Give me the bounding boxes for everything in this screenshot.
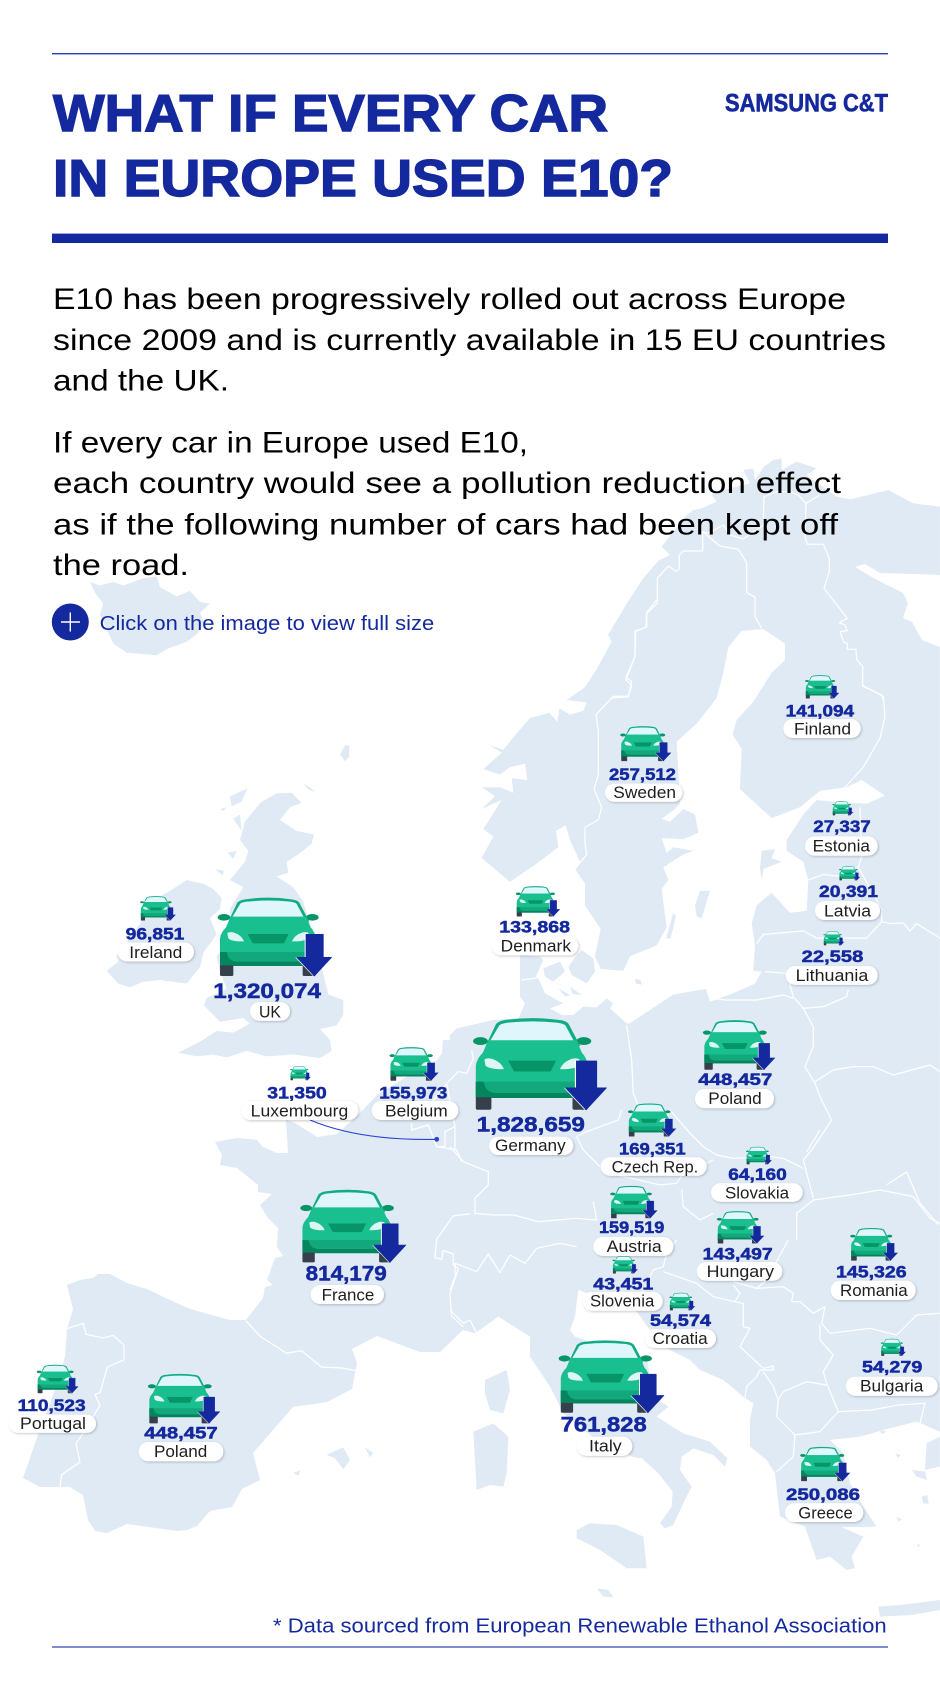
label pill: Latvia: [824, 902, 872, 920]
label pill: UK: [259, 1004, 281, 1022]
bottom rule: [52, 1646, 888, 1648]
value: 169,351: [619, 1140, 686, 1158]
value: 257,512: [609, 766, 676, 784]
value: 96,851: [126, 925, 184, 943]
marker: Luxembourg: [241, 1066, 358, 1121]
marker: France: [300, 1190, 406, 1304]
intro paragraph 1: [53, 283, 886, 398]
value: 54,574: [650, 1312, 712, 1330]
marker: Bulgaria: [846, 1339, 938, 1396]
value: 814,179: [306, 1262, 387, 1285]
land: Italy, Balkans, islands: [450, 1240, 940, 1617]
marker: Ireland: [118, 896, 194, 962]
label pill: Portugal: [20, 1415, 86, 1433]
label pill: France: [322, 1286, 374, 1304]
value: 20,391: [819, 883, 878, 901]
value: 145,326: [836, 1264, 907, 1282]
value: 155,973: [379, 1084, 447, 1102]
value: 250,086: [786, 1486, 860, 1504]
car icon: [703, 1020, 775, 1070]
car icon: [717, 1211, 764, 1244]
land: northern Scandinavia top: [659, 458, 940, 562]
car icon: [37, 1365, 78, 1393]
intro paragraph 1: E10 has been progressively rolled out across Europe: [53, 283, 846, 316]
land: Balearic islands: [293, 1447, 373, 1476]
map of Europe: [23, 458, 940, 1617]
marker: Austria: [593, 1186, 673, 1256]
marker: Poland: [695, 1020, 775, 1108]
car icon: [800, 1447, 850, 1481]
land: Iceland, Britain and Ireland: [90, 576, 349, 1058]
car icon: [389, 1047, 438, 1081]
label pill: Czech Rep.: [612, 1158, 698, 1176]
intro paragraph 2: If every car in Europe used E10,: [53, 426, 528, 459]
marker: Portugal: [9, 1365, 96, 1433]
label pill: Finland: [794, 720, 851, 738]
label pill: Austria: [607, 1238, 663, 1256]
car icon: [805, 675, 839, 698]
icon: plus circle: [52, 604, 89, 640]
marker: Sweden: [605, 726, 682, 802]
label pill: Slovakia: [725, 1184, 790, 1202]
label pill: Croatia: [653, 1330, 709, 1348]
intro paragraph 2: as if the following number of cars had been kept off: [53, 508, 839, 542]
land: Scandinavia, Finland, Baltics: [482, 560, 940, 1025]
marker: Lithuania: [786, 931, 878, 985]
car icon: [290, 1066, 311, 1080]
value: 761,828: [561, 1414, 647, 1437]
value: 31,350: [267, 1084, 327, 1102]
car icon: [620, 726, 671, 761]
sea: White Sea: [855, 564, 940, 647]
car icon: [218, 898, 332, 976]
label pill: Poland: [154, 1443, 207, 1461]
label pill: Denmark: [501, 938, 572, 956]
label pill: Italy: [589, 1438, 623, 1456]
car icon: [628, 1103, 676, 1137]
source note: * Data sourced from European Renewable Ethanol Association: [273, 1615, 887, 1638]
value: 159,519: [599, 1219, 664, 1237]
car icon: [148, 1374, 220, 1423]
value: 133,868: [499, 919, 570, 937]
label pill: Lithuania: [796, 967, 869, 985]
value: 448,457: [698, 1071, 772, 1089]
value: 64,160: [728, 1166, 787, 1184]
car icon: [612, 1256, 638, 1274]
intro paragraph 2: each country would see a pollution reduction effect: [53, 467, 842, 500]
label pill: Ireland: [129, 944, 182, 962]
marker: Hungary: [697, 1211, 782, 1281]
car icon: [300, 1190, 406, 1262]
marker: Slovenia: [583, 1256, 663, 1311]
title rule: [52, 234, 888, 243]
marker: Spain (labelled Poland): [139, 1374, 223, 1461]
label pill: Slovenia: [590, 1293, 655, 1311]
click to view full size: [52, 604, 434, 640]
value: 54,279: [862, 1359, 922, 1377]
marker: Estonia: [805, 801, 878, 856]
marker: Belgium: [372, 1047, 458, 1121]
country borders: [60, 492, 940, 1488]
marker: Croatia: [645, 1293, 716, 1348]
label pill: Germany: [495, 1137, 566, 1155]
label pill: Luxembourg: [251, 1103, 348, 1121]
car icon: [140, 896, 176, 921]
land: France and Iberia: [23, 1040, 480, 1533]
car icon: [473, 1018, 606, 1110]
label pill: Hungary: [707, 1263, 775, 1281]
car icon: [516, 886, 560, 916]
car icon: [823, 931, 844, 945]
logo: Samsung C&amp;T: SAMSUNG C&T: [725, 90, 888, 118]
intro paragraph 2: [53, 426, 842, 582]
intro paragraph 2: the road.: [53, 549, 189, 582]
marker: UK: [213, 898, 332, 1022]
leader line: Luxembourg: [310, 1120, 439, 1142]
marker: Romania: [831, 1228, 916, 1300]
title: WHAT IF EVERY CAR: [53, 85, 608, 143]
label pill: Sweden: [613, 784, 676, 802]
marker: Germany: [473, 1018, 606, 1155]
marker: Finland: [783, 675, 861, 738]
value: 143,497: [703, 1246, 773, 1264]
value: 27,337: [813, 818, 871, 836]
value: 1,320,074: [213, 980, 321, 1003]
marker: Czech Rep.: [601, 1103, 707, 1176]
car icon: [669, 1293, 695, 1310]
label pill: Belgium: [385, 1103, 448, 1121]
car icon: [839, 866, 860, 880]
value: 43,451: [593, 1275, 653, 1293]
label pill: Romania: [840, 1282, 909, 1300]
car icon: [746, 1147, 772, 1164]
marker: Slovakia: [711, 1147, 803, 1202]
marker: Italy: [559, 1340, 664, 1456]
marker: Greece: [785, 1447, 863, 1522]
value: 448,457: [144, 1424, 218, 1442]
top rule: [52, 53, 888, 54]
car icon: [559, 1340, 664, 1413]
intro paragraph 1: since 2009 and is currently available in 15 EU countries: [53, 324, 886, 357]
title: [53, 85, 673, 208]
value: 22,558: [802, 948, 863, 966]
intro paragraph 1: and the UK.: [53, 365, 229, 398]
label pill: Greece: [798, 1504, 853, 1522]
title: IN EUROPE USED E10?: [53, 150, 673, 208]
value: 141,094: [786, 702, 855, 720]
land: central Europe and Denmark: [450, 950, 940, 1240]
car icon: [850, 1228, 898, 1261]
car icon: [881, 1339, 906, 1356]
car icon: [610, 1186, 657, 1218]
marker: Latvia: [815, 866, 880, 920]
value: 1,828,659: [477, 1114, 585, 1137]
label pill: Bulgaria: [860, 1378, 924, 1396]
label pill: Poland: [708, 1090, 762, 1108]
marker: Denmark: [492, 886, 578, 956]
car icon: [832, 801, 853, 815]
label pill: Estonia: [813, 838, 871, 856]
link text: Click on the image to view full size: [100, 613, 434, 635]
value: 110,523: [18, 1397, 86, 1415]
